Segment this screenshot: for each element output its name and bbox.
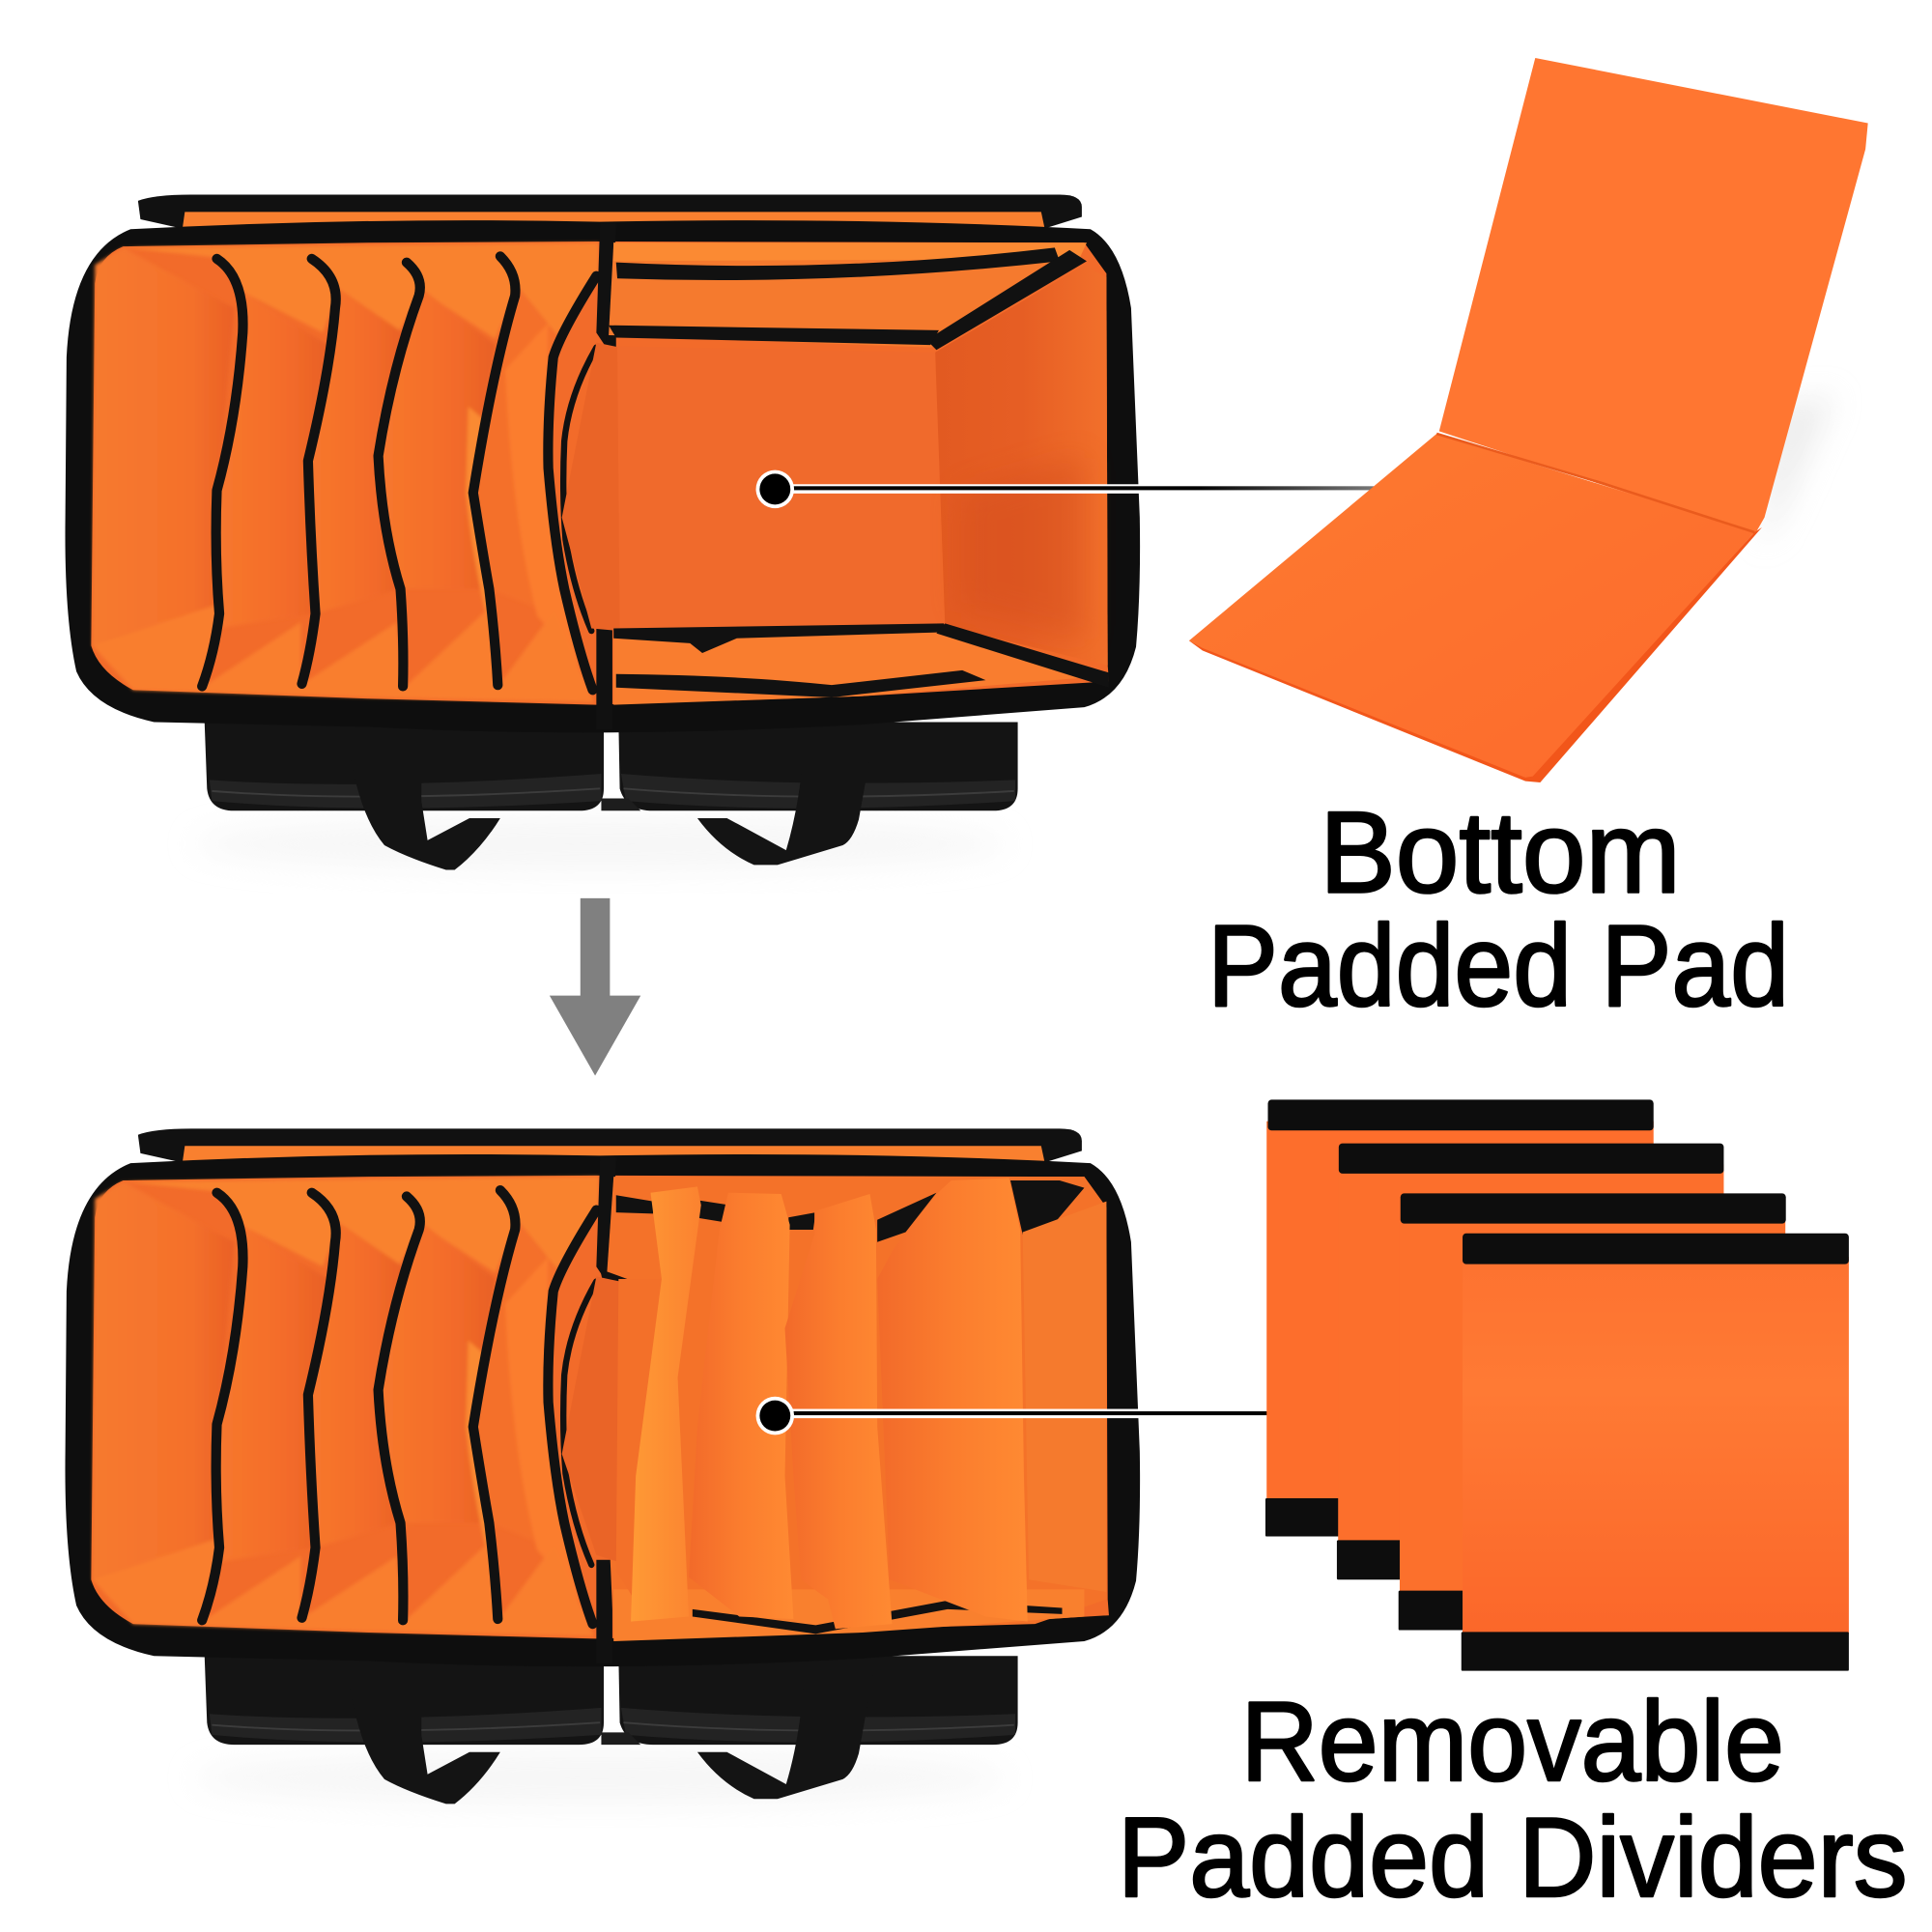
- velcro strap top: [616, 247, 1060, 280]
- left slope: [562, 343, 620, 631]
- interior orange lining: [91, 242, 1109, 705]
- divider 3: [1399, 1193, 1786, 1631]
- divider panel 1: [631, 1186, 701, 1622]
- left front pocket: [205, 722, 604, 810]
- right front pocket: [618, 722, 1018, 810]
- divider 1: [1265, 1099, 1654, 1537]
- center strap between pockets: [601, 799, 640, 810]
- pad shadow: [1762, 394, 1836, 549]
- bottom bag right compartment: [562, 1177, 1106, 1641]
- floor left sliver: [562, 1276, 620, 1562]
- right handle: [697, 737, 873, 865]
- top bag right compartment with visible floor: [562, 242, 1109, 705]
- far right wall: [1023, 1202, 1106, 1592]
- left handle: [348, 737, 500, 870]
- top flap orange strip: [183, 212, 1045, 229]
- floor pad: [617, 346, 945, 631]
- center vertical divider: [596, 223, 616, 729]
- divider 2: [1337, 1144, 1723, 1579]
- callout: top dot and leader line: [756, 470, 1374, 508]
- upper back pleats: [124, 242, 599, 339]
- callout: bottom dot and leader line: [756, 1397, 1267, 1435]
- floor seen between dividers: [616, 1279, 666, 1602]
- top bag: empty compartment view: [65, 195, 1140, 871]
- pleat panels: [216, 286, 579, 666]
- left wall: [93, 247, 234, 689]
- five black elastic strips: [202, 256, 596, 690]
- label: Bottom Padded Pad: Padded Pad: [1208, 901, 1789, 1031]
- pad seat edge: [1189, 527, 1762, 782]
- left compartment fabric: [93, 242, 599, 702]
- right wall: [935, 265, 1108, 666]
- velcro strap bottom: [616, 670, 985, 697]
- divider panel 3: [784, 1194, 892, 1629]
- removable padded dividers product: [1265, 1099, 1849, 1671]
- label: Removable Padded Dividers: Removable: [1240, 1678, 1784, 1804]
- label: Removable Padded Dividers: Padded Dividers: [1118, 1794, 1907, 1920]
- orange floor band: [613, 1589, 1084, 1641]
- back velcro fragments: [600, 1180, 1084, 1298]
- top flap black binding: [138, 195, 1082, 229]
- lower strap: [693, 1601, 1062, 1634]
- back wall: [609, 242, 1084, 348]
- corner diagonal strap lower: [936, 623, 1109, 688]
- arrow pointing down: [550, 898, 640, 1076]
- label: Bottom Padded Pad: [1208, 787, 1789, 1031]
- bottom padded pad product: [1189, 58, 1868, 782]
- pad hinge crease: [1436, 434, 1754, 532]
- pad back panel: [1439, 58, 1868, 535]
- bottom bag: same bag with dividers installed: [65, 1128, 1140, 1805]
- corner diagonal strap: [926, 250, 1087, 350]
- divider 4: [1462, 1234, 1849, 1671]
- divider panel 4: [877, 1178, 1028, 1622]
- main black shell: [65, 220, 1140, 732]
- divider panel 2: [689, 1193, 793, 1619]
- back wall: [601, 1177, 1106, 1636]
- label: Bottom Padded Pad: Bottom: [1320, 787, 1681, 917]
- floor upper border strap: [609, 326, 939, 345]
- soft shadow under bag: [193, 817, 1007, 871]
- label: Removable Padded Dividers: [1118, 1678, 1907, 1920]
- floor lower border strap: [613, 623, 947, 653]
- pad seat panel: [1189, 434, 1754, 778]
- lower bright triangles: [93, 604, 594, 702]
- right wall deep shadow: [961, 456, 1084, 640]
- lower front wall: [613, 629, 1084, 705]
